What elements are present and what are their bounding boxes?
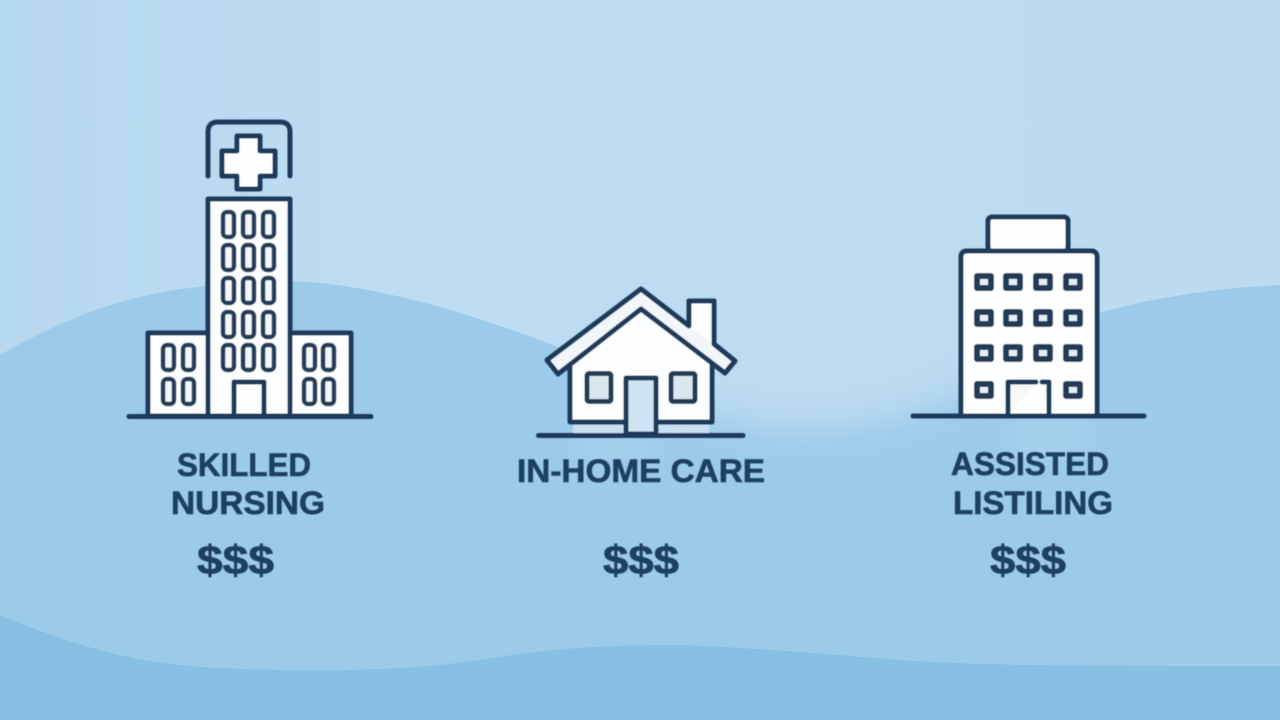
hospital right wing	[290, 333, 351, 416]
wing windows	[163, 345, 334, 404]
house ground line	[538, 433, 743, 438]
hospital door	[234, 382, 264, 416]
label: skilled nursing	[171, 447, 325, 521]
label: skilled nursing: SKILLED	[177, 447, 311, 483]
building door	[1008, 382, 1049, 416]
icon: assisted living building	[913, 217, 1144, 416]
house left window	[587, 374, 611, 402]
building windows	[977, 276, 1080, 396]
hospital ground line	[129, 414, 371, 419]
hospital left wing	[148, 333, 208, 416]
roof	[547, 289, 735, 374]
hospital sign frame	[208, 122, 290, 176]
building ground line	[913, 414, 1144, 418]
cost: in-home care: $$$	[603, 537, 679, 583]
hospital cross	[222, 136, 275, 189]
cost: assisted listiling: $$$	[990, 537, 1066, 583]
icon: in-home care house	[538, 289, 743, 436]
cost: skilled nursing: $$$	[197, 537, 274, 583]
tower windows	[223, 212, 274, 370]
house walls	[570, 308, 712, 422]
house right window	[671, 374, 695, 402]
house door	[626, 378, 656, 434]
building body	[961, 251, 1097, 416]
building roof block	[988, 217, 1068, 251]
icon: skilled nursing hospital	[129, 122, 371, 416]
label: assisted listiling: LISTILING	[953, 485, 1113, 521]
chimney fill	[692, 304, 712, 343]
background: layered blue waves	[0, 282, 1280, 720]
label: assisted listiling	[951, 446, 1113, 521]
label: skilled nursing: NURSING	[171, 485, 325, 521]
label: in-home care: IN-HOME CARE	[517, 453, 765, 489]
label: assisted listiling: ASSISTED	[951, 446, 1109, 482]
chimney	[689, 301, 714, 350]
house foundation strip	[573, 425, 709, 434]
hospital tower	[208, 199, 290, 416]
